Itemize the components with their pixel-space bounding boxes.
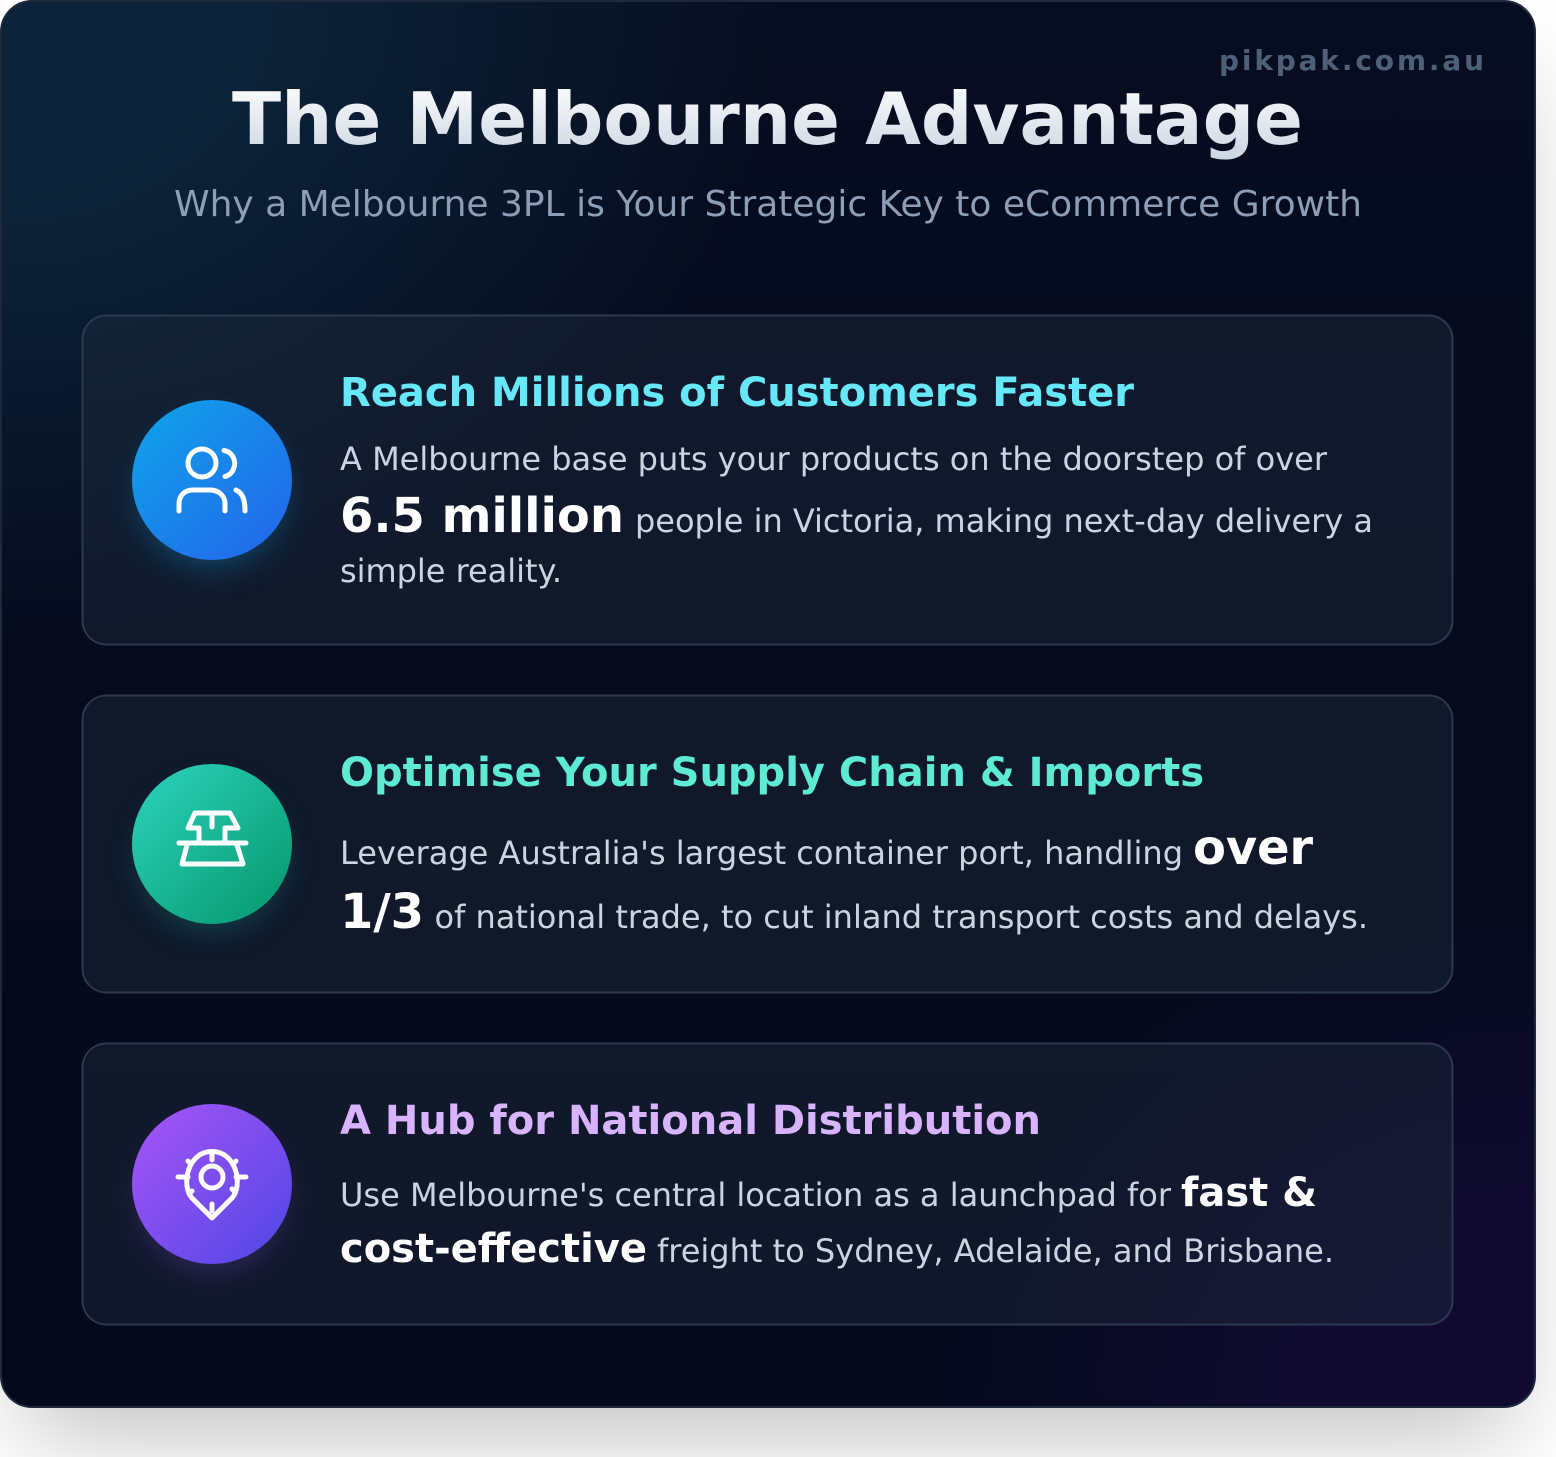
body text: people in Victoria, making next-day delivery a	[635, 502, 1373, 540]
body text: Leverage Australia's largest container port, handling	[340, 834, 1183, 872]
body text: Use Melbourne's central location as a launchpad for	[340, 1176, 1172, 1214]
body text: fast &	[1181, 1170, 1317, 1216]
body text	[340, 1170, 1334, 1272]
heading: Optimise Your Supply Chain & Imports	[340, 750, 1204, 796]
body text: freight to Sydney, Adelaide, and Brisbane.	[657, 1232, 1334, 1270]
title: The Melbourne Advantage	[232, 77, 1303, 161]
icon: customers	[132, 400, 292, 566]
panel: supply chain and imports	[82, 696, 1452, 992]
panel: reach millions of customers	[82, 316, 1452, 644]
subtitle: Why a Melbourne 3PL is Your Strategic Key to eCommerce Growth	[174, 184, 1362, 225]
body text: simple reality.	[340, 552, 562, 590]
panel: national distribution hub	[82, 1044, 1452, 1324]
heading: A Hub for National Distribution	[340, 1098, 1041, 1144]
icon: open box on pallet	[132, 764, 292, 930]
body text: 6.5 million	[340, 488, 624, 544]
watermark: pikpak.com.au	[1219, 44, 1484, 77]
body text: over	[1193, 820, 1313, 876]
body text: cost-effective	[340, 1226, 647, 1272]
body text	[340, 820, 1368, 940]
icon: location pin	[132, 1104, 292, 1270]
body text: 1/3	[340, 884, 424, 940]
body text: A Melbourne base puts your products on the doorstep of over	[340, 440, 1328, 478]
body text	[340, 440, 1373, 590]
heading: Reach Millions of Customers Faster	[340, 370, 1134, 416]
body text: of national trade, to cut inland transport costs and delays.	[434, 898, 1368, 936]
